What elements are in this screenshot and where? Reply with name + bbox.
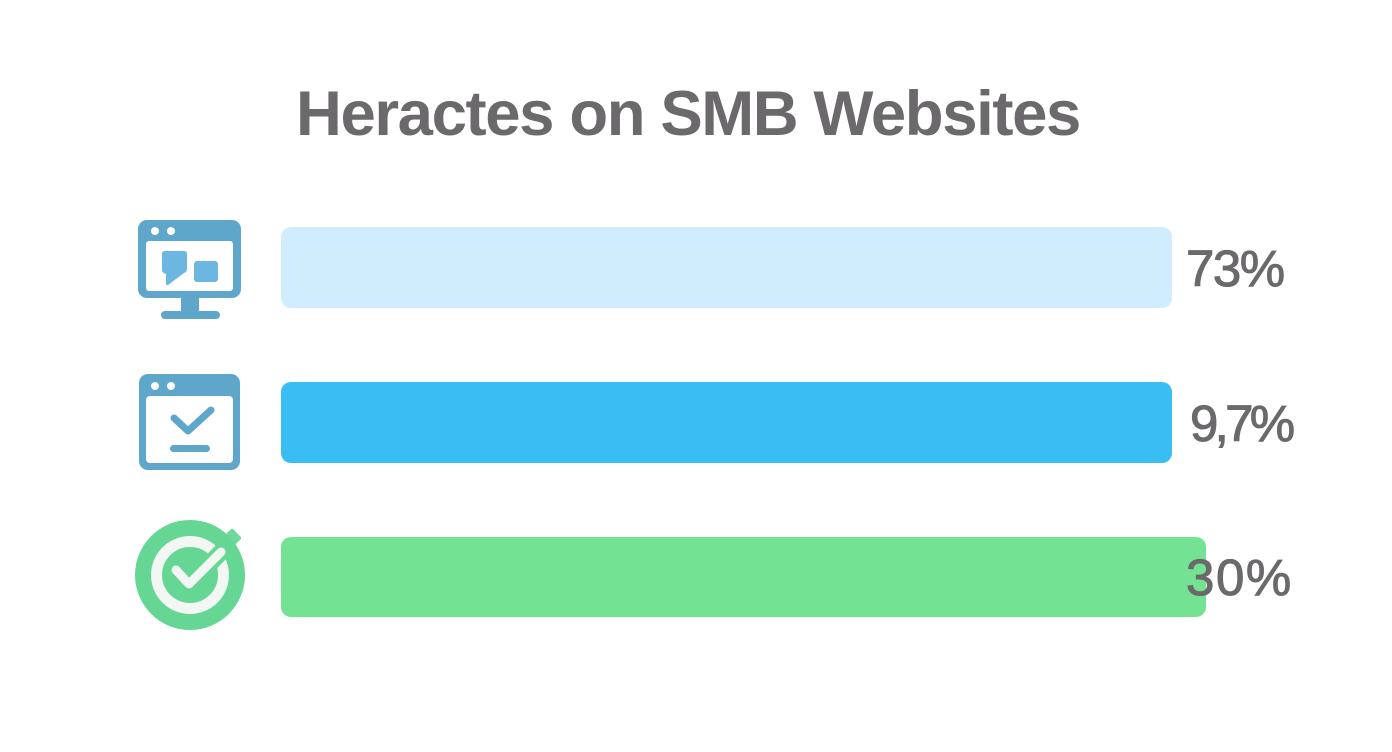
value: 73%: 73% xyxy=(1186,240,1284,297)
icon: window with check mark xyxy=(139,374,240,470)
icon: monitor with chat bubbles xyxy=(138,220,241,319)
value: 9,7%: 9,7% xyxy=(1190,395,1291,452)
icon: green target check xyxy=(135,520,245,630)
bar: 9,7% xyxy=(281,382,1172,463)
bar: 30% xyxy=(281,537,1206,617)
value: 30%: 30% xyxy=(1186,549,1293,606)
bar: 73% xyxy=(281,227,1172,308)
title: Heractes on SMB Websites xyxy=(296,79,1080,149)
